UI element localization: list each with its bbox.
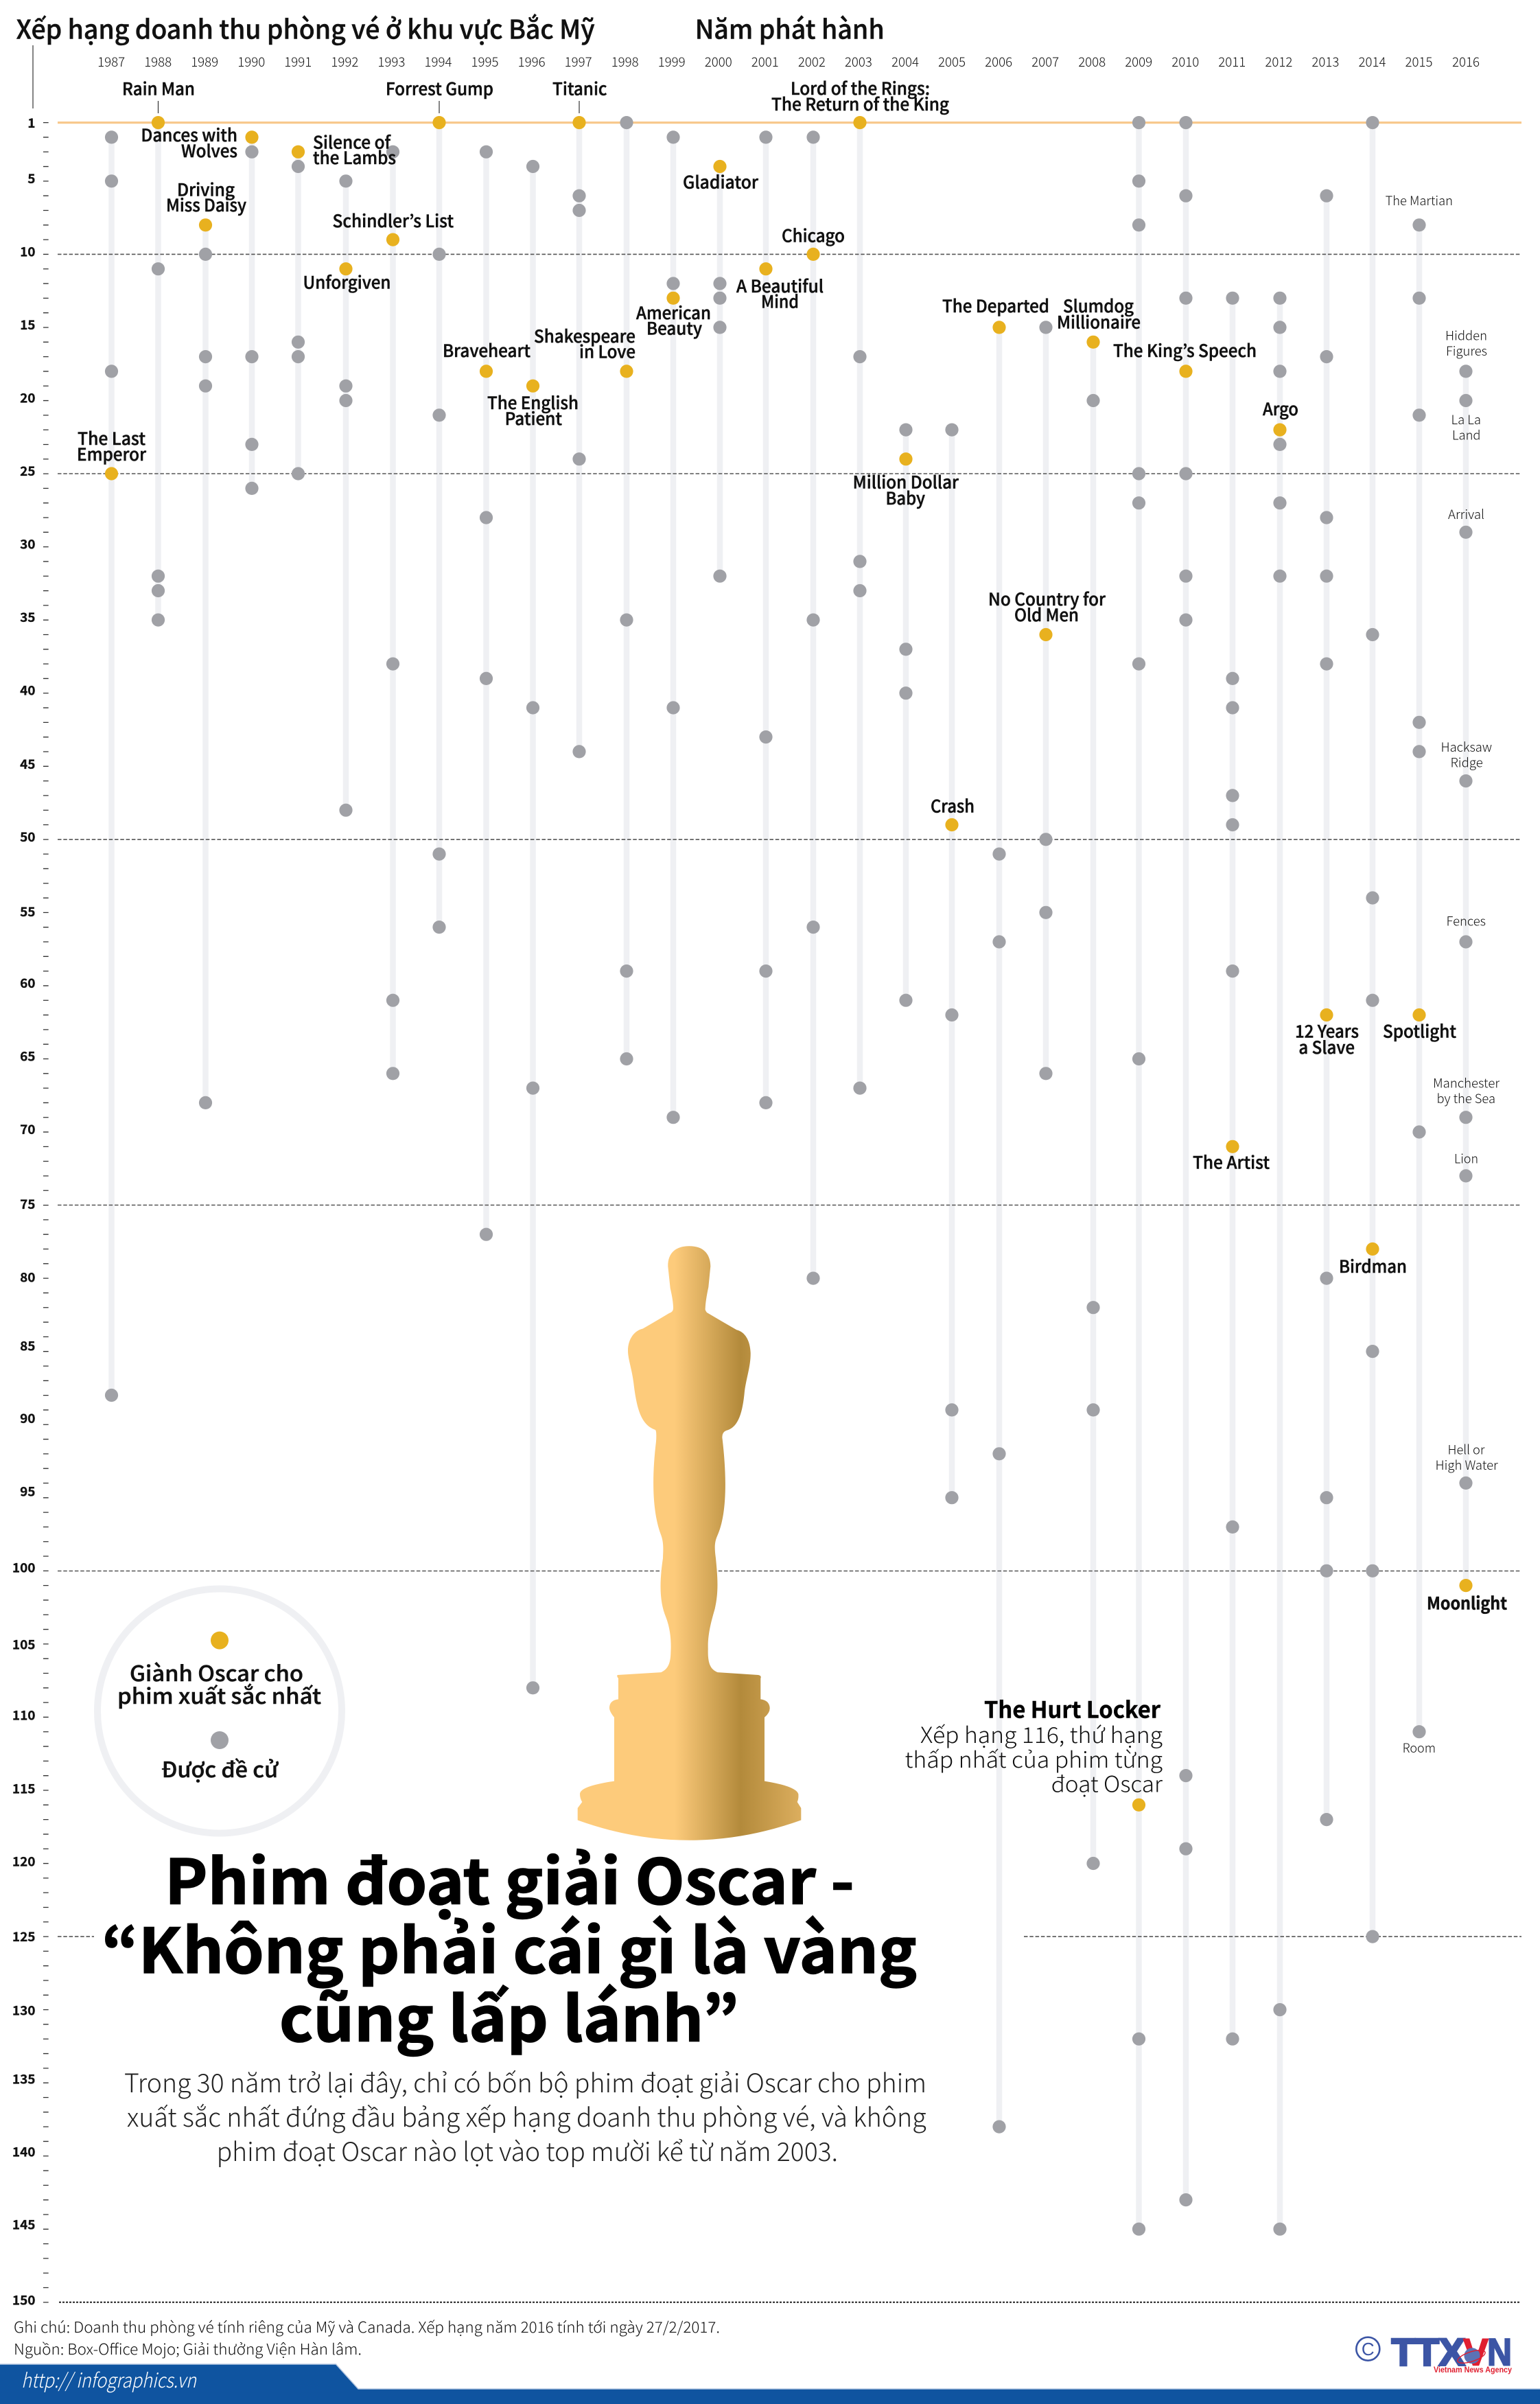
column: 2016 [1463,371,1469,1586]
y axis rank labels: 140 [12,2142,36,2161]
dots: 1988 [152,116,165,627]
year labels: 2009 [1125,52,1152,71]
year labels: 2008 [1078,52,1106,71]
column: 2001 [763,137,769,1102]
nominee label: La La Land: Land [1452,426,1481,444]
label: The Artist: The Artist [1193,1150,1270,1175]
dots: 1992 [339,174,353,817]
label: American Beauty: Beauty [646,316,702,340]
y axis rank labels: 55 [20,902,36,921]
y axis rank labels: 25 [20,461,36,480]
column: 2002 [810,137,816,1278]
dots: 2007 [1039,321,1053,1080]
label: A Beautiful Mind [736,273,824,314]
year labels: 2006 [985,52,1012,71]
label: Gladiator: Gladiator [683,169,759,194]
label: Titanic: Titanic [552,76,607,100]
column: 2006 [996,327,1002,2127]
nominee label: The Martian: The Martian [1386,192,1453,209]
column: 1999 [670,137,676,1118]
y axis rank labels: 90 [20,1409,36,1427]
intro paragraph: Trong 30 năm trở lại đây, chỉ có bốn bộ phim đoạt giải Oscar cho phim [124,2062,926,2100]
label: Dances with Wolves [141,122,237,163]
column: 2003 [857,123,863,1088]
nominee label: Hidden Figures [1445,327,1487,360]
label: Driving Miss Daisy [166,177,246,217]
y axis rank labels: 40 [20,681,36,700]
label: The English Patient [487,390,579,430]
label: Lord of the Rings: The Return of the King [771,91,950,116]
heading: y axis title: Xếp hạng doanh thu phòng vé ở khu vực Bắc Mỹ [16,9,595,47]
label: Spotlight: Spotlight [1383,1019,1456,1043]
dots: 2012 [1273,292,1287,2236]
y axis tick marks [43,122,49,2304]
y axis rank labels: 60 [20,973,36,992]
label: American Beauty [636,300,711,340]
leader ticks for top-ranked winners [158,101,579,113]
year labels: 1998 [611,52,639,71]
dots: 1998 [620,116,633,1065]
label: 12 Years a Slave [1295,1019,1359,1059]
label: Silence of the Lambs: Silence of [313,129,391,154]
y axis rank labels: 95 [20,1482,36,1501]
y axis rank labels: 150 [12,2291,36,2309]
label: Shakespeare in Love: in Love [579,338,635,363]
heading: x axis title: Năm phát hành [695,9,885,47]
callout: The Hurt Locker: đoạt Oscar [1051,1768,1163,1799]
label: Lord of the Rings: Lord of the Rings: [791,76,930,100]
column: 2014 [1370,123,1375,1937]
year labels: 1988 [144,52,172,71]
column: 2009 [1136,123,1142,2229]
y axis rank labels: 130 [12,2001,36,2020]
callout: The Hurt Locker: The Hurt Locker [984,1692,1161,1725]
nominee label: Lion: Lion [1454,1150,1478,1168]
column: 1988 [155,123,161,620]
label: 12 Years a Slave: 12 Years [1295,1019,1359,1043]
year labels: 1994 [424,52,452,71]
intro paragraph: phim đoạt Oscar nào lọt vào top mười kể từ năm 2003. [217,2131,838,2169]
column: 2000 [717,166,723,576]
nominee label: Hacksaw Ridge [1441,738,1492,771]
year labels: 1992 [331,52,358,71]
label: Lord of the Rings [771,76,950,116]
label: American Beauty: American [636,300,711,325]
nominee label: Hell or High Water: High Water [1436,1456,1498,1474]
logo: TTXVN: C [1362,2339,1375,2359]
y axis rank labels: 1 [27,113,36,132]
label: Million Dollar Baby: Baby [885,485,925,510]
year labels: 2000 [705,52,732,71]
dots: 1999 [666,130,680,1124]
column: 1990 [249,137,255,488]
column: 2008 [1090,342,1096,1863]
title [102,1833,917,2059]
label: Driving Miss Daisy: Miss Daisy [166,192,246,217]
label: Million Dollar Baby: Million Dollar [853,470,959,494]
logo: TTXVN: N [1487,2331,1512,2374]
column: 2007 [1043,327,1049,1074]
year labels: 1996 [518,52,546,71]
y axis rank labels: 5 [27,169,36,187]
y axis vertical rule [32,45,34,108]
label: The Last Emperor: Emperor [77,441,147,466]
label: Dances with Wolves: Wolves [181,138,237,163]
nominee label: La La Land [1451,411,1481,444]
label: Million Dollar Baby [853,470,959,510]
y axis rank labels: 75 [20,1194,36,1213]
year labels: 2002 [798,52,826,71]
year labels: 2005 [938,52,966,71]
column: 1996 [530,166,536,1688]
dots: 2011 [1226,292,1239,2046]
label: Slumdog Millionaire: Slumdog [1063,293,1134,318]
label: 12 Years a Slave: a Slave [1298,1035,1355,1059]
footnote and source: Ghi chú: Doanh thu phòng vé tính riêng của Mỹ và Canada. Xếp hạng năm 2016 tính tới ngày 27/2/2017. [14,2315,720,2337]
dots: 1996 [526,160,539,1694]
dots: 1991 [292,146,305,481]
label: Slumdog Millionaire: Millionaire [1057,310,1141,334]
nominee label: Room: Room [1403,1739,1436,1757]
y axis rank labels: 145 [12,2215,36,2234]
label: No Country for Old Men: Old Men [1014,602,1079,627]
nominee label: La La Land: La La [1451,411,1481,428]
label: The English Patient: The English [487,390,579,415]
dots: 2006 [992,321,1006,2134]
nominee label: Hacksaw Ridge: Hacksaw [1441,738,1492,756]
dots: 1990 [245,130,259,495]
year labels: 1999 [658,52,686,71]
dots: 2003 [853,116,867,1095]
year labels: 2012 [1265,52,1292,71]
year labels: 1995 [471,52,498,71]
y axis rank labels: 15 [20,315,36,334]
y axis rank labels: 35 [20,608,36,626]
year labels: 2004 [891,52,919,71]
y axis rank labels: 85 [20,1337,36,1355]
y axis rank labels: 115 [12,1779,36,1798]
y axis rank labels: 65 [20,1046,36,1065]
label: Crash: Crash [931,794,975,818]
column: 2004 [903,430,909,1000]
label: No Country for Old Men [988,586,1106,627]
label: Unforgiven: Unforgiven [303,269,391,294]
label: The Last Emperor [77,426,147,466]
column: 2011 [1230,298,1235,2039]
dots: 2005 [945,423,959,1504]
logo: TTXVN: Vietnam News Agency [1434,2365,1512,2374]
logo: TTXVN: TTX [1392,2331,1465,2374]
label: A Beautiful Mind: A Beautiful [736,273,824,298]
callout: The Hurt Locker: thấp nhất của phim từng [905,1743,1163,1775]
column: 2012 [1277,298,1283,2229]
year labels: 1991 [284,52,312,71]
year labels: 2007 [1031,52,1059,71]
nominee label: Hidden Figures: Hidden [1445,327,1487,345]
label: A Beautiful Mind: Mind [761,289,799,314]
callout: The Hurt Locker [905,1692,1163,1799]
column: 2010 [1183,123,1189,2200]
column: 2013 [1324,196,1329,1820]
year labels: 2013 [1311,52,1339,71]
dots: 2002 [806,130,820,1285]
legend text: winner: Giành Oscar cho [130,1656,303,1687]
label: Silence of the Lambs [313,129,396,170]
column: 2005 [949,430,955,1498]
column: 2015 [1416,225,1422,1732]
dots: 1987 [105,130,118,1402]
dots: 1989 [199,218,212,1109]
label: Silence of the Lambs: the Lambs [313,145,396,170]
y axis rank labels: 105 [12,1635,36,1654]
dots: 2015 [1412,218,1426,1738]
dots: 1994 [432,116,446,934]
year labels: 1990 [237,52,265,71]
column: 1987 [108,137,115,1395]
legend text: winner: phim xuất sắc nhất [117,1679,321,1710]
dots: 1993 [386,146,399,1080]
column: 1989 [202,225,209,1102]
dots: 2014 [1366,116,1379,1943]
legend dot: winner [211,1632,229,1650]
year labels: 2001 [751,52,779,71]
label: Birdman: Birdman [1339,1253,1407,1278]
nominee label: Manchester by the Sea: Manchester [1433,1074,1500,1091]
dots: 2013 [1320,189,1333,1826]
dots: 2009 [1132,116,1145,2236]
nominee label: Hidden Figures: Figures [1446,342,1487,360]
year labels: 2011 [1218,52,1246,71]
column: 1993 [390,152,396,1074]
logo: TTXVN [1356,2331,1512,2374]
label: Moonlight: Moonlight [1427,1591,1507,1615]
y axis rank labels: 120 [12,1852,36,1871]
footer band [0,2364,1540,2404]
nominee label: Manchester by the Sea: by the Sea [1437,1089,1495,1107]
nominee label: Fences: Fences [1447,912,1486,930]
label: No Country for Old Men: No Country for [988,586,1106,611]
y axis rank labels: 135 [12,2070,36,2088]
dots: 2004 [899,423,913,1007]
nominee label: Manchester by the Sea [1433,1074,1500,1107]
intro paragraph [124,2062,926,2169]
dots: 1997 [572,116,586,758]
year labels: 2014 [1359,52,1386,71]
footer url: http:// infographics.vn [21,2365,197,2394]
title: Phim đoạt giải Oscar - [165,1833,854,1922]
label: Dances with Wolves: Dances with [141,122,237,147]
label: Braveheart: Braveheart [443,338,530,362]
y axis rank labels: 125 [12,1927,36,1945]
title: cũng lấp lánh” [279,1970,739,2059]
label: Rain Man: Rain Man [122,76,195,100]
dots: 2008 [1086,336,1100,1870]
year labels: 1987 [97,52,125,71]
label: Forrest Gump: Forrest Gump [386,76,493,100]
nominee label: Hell or High Water [1436,1440,1498,1474]
y axis rank labels: 30 [20,535,36,553]
y axis rank labels: 45 [20,754,36,773]
year labels: 1997 [565,52,592,71]
legend text: winner [117,1656,321,1710]
footnote and source [14,2315,720,2359]
label: Schindler's List: Schindler’s List [332,208,454,233]
callout: The Hurt Locker: Xếp hạng 116, thứ hạng [920,1718,1163,1750]
footnote and source: Nguồn: Box-Office Mojo; Giải thưởng Viện Hàn lâm. [14,2337,362,2359]
column: 1998 [624,123,629,1059]
y axis rank labels: 80 [20,1268,36,1286]
year labels: 2003 [845,52,872,71]
dots: 2001 [759,130,773,1109]
year labels: 2015 [1405,52,1433,71]
dots: 2016 [1459,365,1473,1592]
label: The English Patient: Patient [505,406,562,430]
column: 1997 [576,123,582,752]
label: Shakespeare in Love [534,323,635,363]
panel: legend [97,1588,342,1833]
column: 1994 [436,123,442,927]
nominee label: Arrival: Arrival [1448,505,1484,523]
label: Argo: Argo [1263,396,1298,421]
y axis rank labels: 100 [12,1558,36,1577]
nominee label: Hell or High Water: Hell or [1448,1440,1485,1458]
year labels [97,52,1480,71]
y axis rank labels: 50 [20,827,36,846]
label: Chicago: Chicago [782,223,845,248]
dots: 2010 [1179,116,1193,2206]
column: 1992 [343,181,349,810]
label: Driving Miss Daisy: Driving [177,177,235,202]
intro paragraph: xuất sắc nhất đứng đầu bảng xếp hạng doanh thu phòng vé, và không [127,2096,926,2134]
label: Slumdog Millionaire [1057,293,1141,334]
y axis rank labels: 110 [12,1706,36,1724]
title: “Không phải cái gì là vàng [102,1902,917,1991]
logo: TTXVN: V [1463,2331,1489,2374]
y axis rank labels: 10 [20,242,36,260]
label: The King's Speech: The King’s Speech [1113,338,1257,362]
dots: 2000 [713,160,727,583]
year labels: 1993 [377,52,405,71]
column: 1995 [483,152,489,1234]
label: The Departed: The Departed [942,293,1049,318]
label: The Last Emperor: The Last [78,426,145,450]
y axis rank labels [12,113,36,2309]
legend dot: nominee [211,1731,229,1749]
year labels: 2016 [1452,52,1480,71]
year labels: 1989 [191,52,218,71]
legend text: nominee: Được đề cử [161,1753,279,1783]
label: Shakespeare in Love: Shakespeare [534,323,635,348]
dots: 1995 [480,146,493,1241]
y axis rank labels: 20 [20,389,36,406]
y axis rank labels: 70 [20,1120,36,1138]
nominee label: Hacksaw Ridge: Ridge [1451,753,1483,771]
column: 1991 [295,152,301,474]
year labels: 2010 [1171,52,1199,71]
icon: Oscar statue [578,1246,801,1840]
